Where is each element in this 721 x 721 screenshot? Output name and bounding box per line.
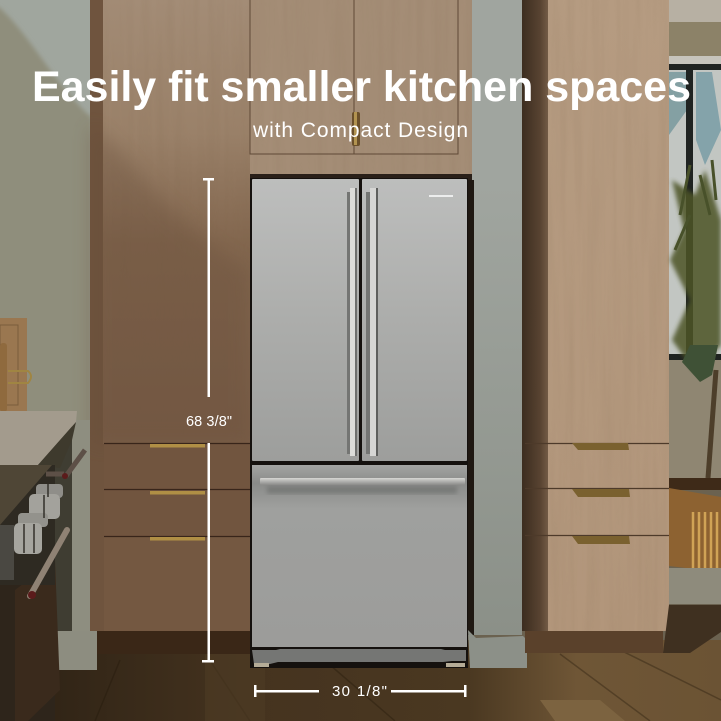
freezer drawer [252,465,467,647]
right wall and window with plant [663,0,721,653]
left french door [252,179,359,461]
floor [0,640,721,721]
subtitle: with Compact Design [252,119,468,142]
basket [669,478,721,572]
left drawers [104,444,250,631]
width label: 30 1/8" [332,683,387,700]
right drawers [525,443,669,544]
oven knobs [14,484,63,554]
oven handles [28,450,85,599]
pillar [467,0,527,668]
base grille [252,649,466,664]
right tall cabinet [522,0,669,653]
range [0,580,55,721]
plant [670,160,721,478]
title: Easily fit smaller kitchen spaces [32,63,691,111]
height label: 68 3/8" [186,414,232,430]
refrigerator [250,178,468,668]
skirting [55,631,97,670]
counter [0,411,77,465]
background: left wall [0,0,92,721]
door handles [347,188,378,456]
right french door [362,179,467,461]
upper cabinets [250,0,472,180]
wall column below counter [72,420,90,635]
left counter and range [0,318,97,721]
cutting boards [0,318,31,412]
left tall cabinet [90,0,250,654]
logo [429,195,453,197]
